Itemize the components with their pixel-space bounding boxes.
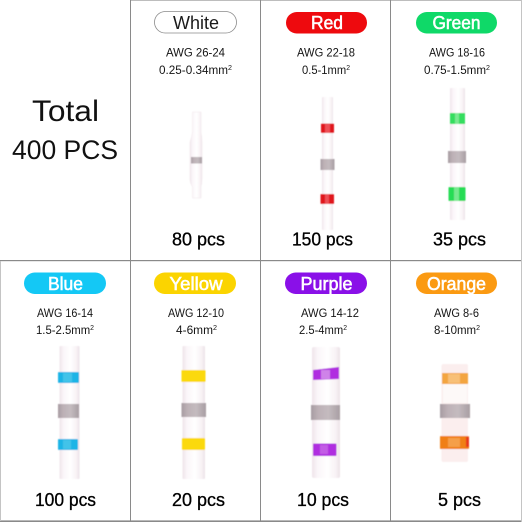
- badge: red: [286, 12, 367, 34]
- connector: red: [320, 97, 334, 230]
- awg spec: blue: AWG 16-14: [37, 308, 94, 320]
- panel: red: [286, 12, 367, 250]
- badge: orange: Orange: [427, 274, 486, 294]
- size spec: orange: 8-10mm: [434, 325, 476, 337]
- size spec: red: 0.5-1mm: [302, 65, 347, 77]
- size spec: green: 2: [486, 65, 490, 72]
- count: orange: 5 pcs: [438, 490, 481, 510]
- size spec: red: 2: [346, 65, 350, 72]
- panel: purple: [285, 272, 367, 510]
- badge: white: [154, 12, 236, 33]
- badge: yellow: Yellow: [170, 274, 224, 294]
- heading: total: Total: [32, 95, 99, 128]
- count: yellow: 20 pcs: [172, 490, 225, 510]
- badge: blue: [24, 272, 106, 294]
- size spec: blue: 2: [90, 325, 94, 332]
- badge: purple: [285, 272, 367, 294]
- connector: white: [190, 112, 202, 198]
- badge: red: Red: [311, 13, 343, 33]
- size spec: purple: 2.5-4mm: [299, 325, 344, 337]
- panel: yellow: [154, 272, 236, 510]
- size spec: white: 0.25-0.34mm: [159, 65, 227, 77]
- count: green: 35 pcs: [433, 230, 486, 250]
- heading: 400 pcs: 400 PCS: [12, 135, 118, 165]
- awg spec: purple: AWG 14-12: [301, 308, 359, 320]
- size spec: green: 0.75-1.5mm: [424, 65, 485, 77]
- panel: green: [416, 12, 497, 250]
- panel: white: [154, 12, 236, 250]
- badge: green: Green: [432, 13, 480, 33]
- connector: blue: [58, 346, 80, 479]
- count: purple: 10 pcs: [297, 490, 349, 510]
- awg spec: red: AWG 22-18: [297, 48, 355, 60]
- size spec: blue: 1.5-2.5mm: [36, 325, 91, 337]
- badge: green: [416, 12, 497, 34]
- count: blue: 100 pcs: [35, 490, 96, 510]
- badge: orange: [416, 272, 497, 294]
- awg spec: white: AWG 26-24: [166, 48, 226, 60]
- awg spec: yellow: AWG 12-10: [168, 308, 224, 320]
- size spec: yellow: 4-6mm: [176, 325, 212, 337]
- size spec: yellow: 2: [213, 325, 217, 332]
- panel: blue: [24, 272, 106, 510]
- awg spec: orange: AWG 8-6: [434, 308, 479, 320]
- size spec: white: 2: [228, 65, 232, 72]
- connector: green: [448, 88, 466, 220]
- badge: purple: Purple: [300, 274, 352, 294]
- badge: white: White: [173, 13, 219, 33]
- connector: purple: [311, 347, 340, 478]
- connector: orange: [440, 364, 470, 462]
- panel: total count: [12, 95, 118, 165]
- badge: yellow: [154, 272, 236, 294]
- size spec: purple: 2: [343, 325, 347, 332]
- size spec: orange: 2: [476, 325, 480, 332]
- panel: orange: [416, 272, 497, 510]
- badge: blue: Blue: [48, 274, 83, 294]
- count: red: 150 pcs: [292, 230, 353, 250]
- awg spec: green: AWG 18-16: [429, 48, 485, 60]
- count: white: 80 pcs: [172, 230, 225, 250]
- connector: yellow: [182, 346, 206, 479]
